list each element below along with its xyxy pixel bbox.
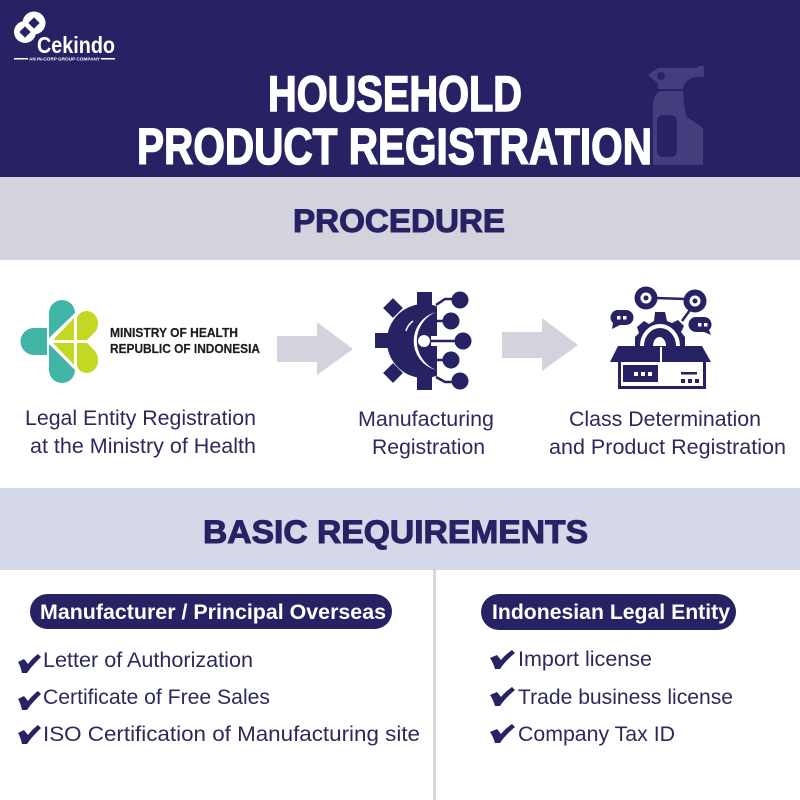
box flaps: [610, 346, 660, 362]
icon: box with gear and chat bubbles: [610, 290, 711, 389]
logo: Cekindo: Cekindo: [37, 32, 115, 58]
icon: spray bottle nozzle hole: [657, 72, 665, 80]
step 1 label: [25, 407, 256, 458]
arrow 1: [277, 322, 353, 375]
title: [137, 66, 652, 175]
box body: [618, 362, 621, 389]
step 3 label: Class Determination: [569, 408, 761, 431]
step 2 label: Registration: [372, 436, 485, 459]
checklist left: Letter of Authorization: [43, 649, 253, 672]
checklist right: Trade business license: [518, 686, 733, 709]
gear: [635, 312, 685, 347]
step 2 label: [358, 408, 494, 459]
icon: spray bottle label: [657, 115, 677, 157]
step 1 label: Legal Entity Registration: [25, 407, 256, 430]
procedure step labels: [25, 407, 786, 459]
arrow 2: [502, 318, 578, 371]
step 3 label: and Product Registration: [549, 436, 786, 459]
pill heading right: [481, 594, 736, 630]
column divider: [433, 570, 436, 800]
step 2 label: Manufacturing: [358, 408, 494, 431]
checklist right: [490, 648, 733, 746]
pill heading right: Indonesian Legal Entity: [492, 601, 730, 624]
header banner: [0, 0, 800, 177]
section band: basic requirements: BASIC REQUIREMENTS: [203, 514, 588, 550]
logo wordmark: MINISTRY OF HEALTH: [110, 325, 238, 340]
checklist left: Certificate of Free Sales: [43, 686, 270, 709]
section band: procedure: [0, 177, 800, 260]
pill heading left: [30, 594, 392, 629]
logo: Cekindo: AN IN-CORP GROUP COMPANY: [29, 56, 100, 62]
checklist right: Import license: [518, 648, 652, 671]
checklist right: Company Tax ID: [518, 723, 675, 746]
section band: basic requirements: [0, 488, 800, 570]
icon: gear with circuit nodes: [375, 292, 472, 390]
section band: procedure: PROCEDURE: [293, 203, 505, 239]
logo: Ministry of Health: [20, 300, 261, 383]
step 3 label: [549, 408, 786, 459]
pill heading left: Manufacturer / Principal Overseas: [40, 601, 386, 624]
logo wordmark: [110, 325, 261, 356]
logo: Cekindo: [14, 12, 115, 62]
checklist left: [18, 649, 420, 746]
step 1 label: at the Ministry of Health: [30, 435, 256, 458]
logo wordmark: REPUBLIC OF INDONESIA: [110, 341, 261, 356]
icon: spray bottle watermark: [648, 66, 704, 165]
panel: manufacturer / principal overseas: [18, 594, 420, 746]
panel: indonesian legal entity: [481, 594, 736, 746]
title: HOUSEHOLD: [268, 66, 522, 122]
title: PRODUCT REGISTRATION: [137, 118, 652, 175]
checklist left: ISO Certification of Manufacturing site: [43, 723, 420, 746]
